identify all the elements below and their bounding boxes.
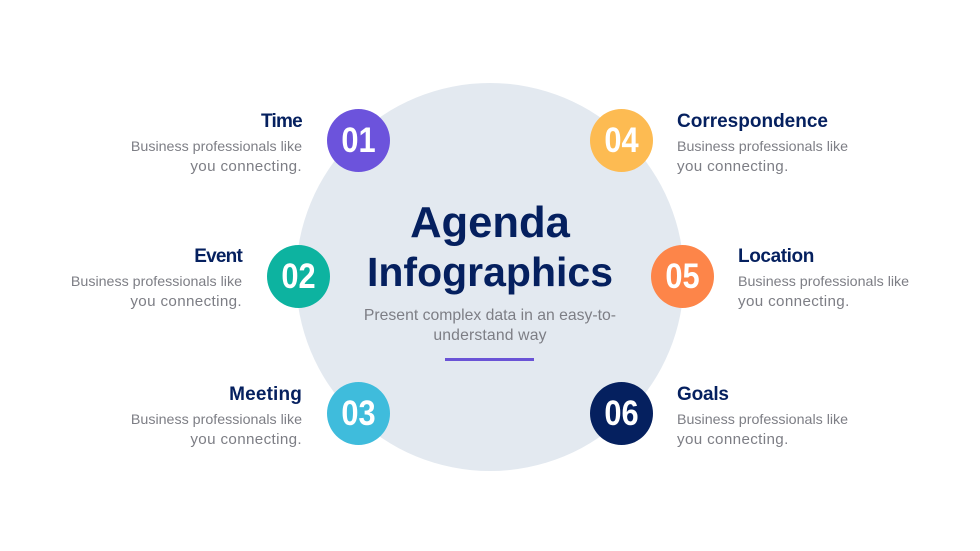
badge 06: 06: [604, 394, 639, 433]
item: Meeting: Meeting: [229, 384, 302, 405]
badge 02: [267, 245, 330, 308]
item: Goals: you connecting.: [677, 431, 789, 448]
badge 01: 01: [341, 121, 376, 160]
item: Event: you connecting.: [130, 293, 242, 310]
badge 05: [651, 245, 714, 308]
badge 03: [327, 382, 390, 445]
item: Event: Event: [194, 246, 242, 267]
item: Location: [738, 246, 909, 310]
item: Goals: Business professionals like: [677, 412, 848, 428]
item: Meeting: [131, 384, 302, 448]
item: Meeting: Business professionals like: [131, 412, 302, 428]
item: Meeting: you connecting.: [190, 431, 302, 448]
item: Event: [71, 246, 243, 310]
item: Time: [131, 111, 302, 175]
title: [367, 199, 613, 295]
item: Location: you connecting.: [738, 293, 850, 310]
item: Correspondence: you connecting.: [677, 158, 789, 175]
item: Location: Location: [738, 246, 814, 267]
badge 04: 04: [604, 121, 639, 160]
subtitle: understand way: [433, 326, 547, 344]
badge 06: [590, 382, 653, 445]
item: Goals: Goals: [677, 384, 729, 405]
item: Time: Time: [261, 111, 302, 132]
center circle: [296, 83, 684, 471]
item: Time: you connecting.: [190, 158, 302, 175]
subtitle: [364, 307, 616, 344]
item: Event: Business professionals like: [71, 274, 242, 290]
badge 05: 05: [665, 257, 700, 296]
title: Infographics: [367, 249, 613, 295]
item: Goals: [677, 384, 848, 448]
title: Agenda: [410, 199, 570, 247]
badge 04: [590, 109, 653, 172]
item: Correspondence: Correspondence: [677, 111, 828, 132]
subtitle: Present complex data in an easy-to-: [364, 307, 616, 324]
badge 02: 02: [281, 257, 316, 296]
badge 03: 03: [341, 394, 376, 433]
underline accent: [445, 358, 534, 361]
badge 01: [327, 109, 390, 172]
item: Time: Business professionals like: [131, 139, 302, 155]
item: Location: Business professionals like: [738, 274, 909, 290]
item: Correspondence: [677, 111, 848, 175]
item: Correspondence: Business professionals like: [677, 139, 848, 155]
